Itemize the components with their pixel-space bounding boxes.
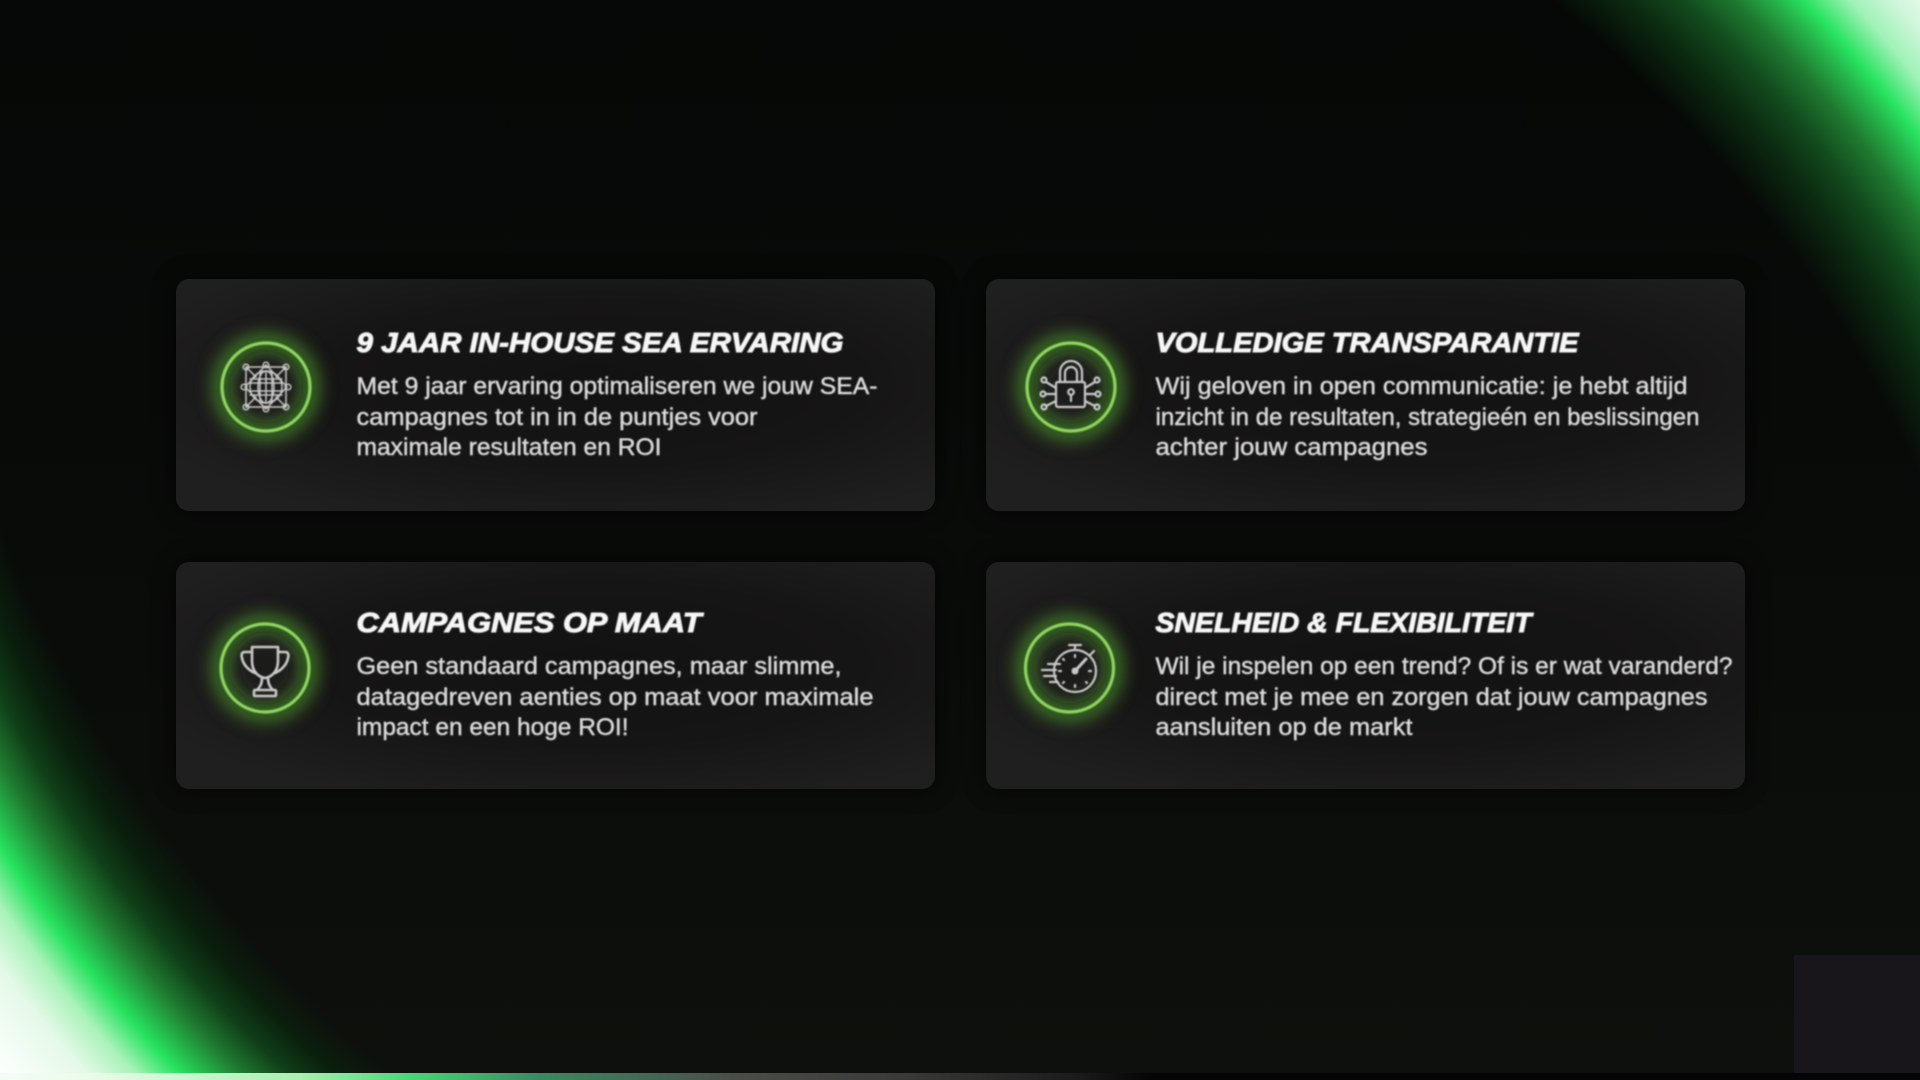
body text: impact en een hoge ROI! bbox=[356, 714, 628, 741]
body text bbox=[356, 373, 878, 461]
bottom right dark patch bbox=[1794, 955, 1920, 1073]
body text: achter jouw campagnes bbox=[1156, 434, 1428, 461]
heading: 9 JAAR IN-HOUSE SEA ERVARING bbox=[356, 327, 844, 358]
body text: campagnes tot in in de puntjes voor bbox=[356, 404, 758, 431]
heading: SNELHEID & FLEXIBILITEIT bbox=[1156, 607, 1534, 638]
icon: padlock circuit in neon ring bbox=[1015, 331, 1127, 443]
body text: direct met je mee en zorgen dat jouw campagnes bbox=[1156, 684, 1708, 711]
neon glow: top right corner bbox=[960, 0, 1920, 1080]
body text: Wij geloven in open communicatie: je hebt altijd bbox=[1156, 373, 1688, 400]
heading: VOLLEDIGE TRANSPARANTIE bbox=[1156, 327, 1580, 358]
body text: inzicht in de resultaten, strategieén en beslissingen bbox=[1156, 404, 1700, 431]
bottom gradient strip bbox=[0, 1073, 1920, 1080]
panel: 9 jaar in-house SEA ervaring bbox=[176, 279, 935, 511]
heading: CAMPAGNES OP MAAT bbox=[356, 607, 705, 638]
panel: volledige transparantie bbox=[986, 279, 1745, 511]
body text bbox=[1156, 653, 1732, 741]
body text: Wil je inspelen op een trend? Of is er wat varanderd? bbox=[1156, 653, 1732, 680]
body text bbox=[1156, 373, 1700, 461]
icon: stopwatch in neon ring bbox=[1014, 612, 1126, 724]
body text: Met 9 jaar ervaring optimaliseren we jouw SEA- bbox=[356, 373, 878, 400]
body text: aansluiten op de markt bbox=[1156, 714, 1413, 741]
body text: Geen standaard campagnes, maar slimme, bbox=[356, 653, 842, 680]
body text: datagedreven aenties op maat voor maximale bbox=[356, 684, 874, 711]
body text: maximale resultaten en ROI bbox=[356, 434, 662, 461]
panel: snelheid en flexibiliteit bbox=[986, 562, 1745, 789]
panel: campagnes op maat bbox=[176, 562, 935, 789]
body text bbox=[356, 653, 874, 741]
neon glow: bottom left corner bbox=[0, 0, 960, 1080]
icon: trophy in neon ring bbox=[209, 612, 321, 724]
icon: globe network in neon ring bbox=[210, 331, 322, 443]
